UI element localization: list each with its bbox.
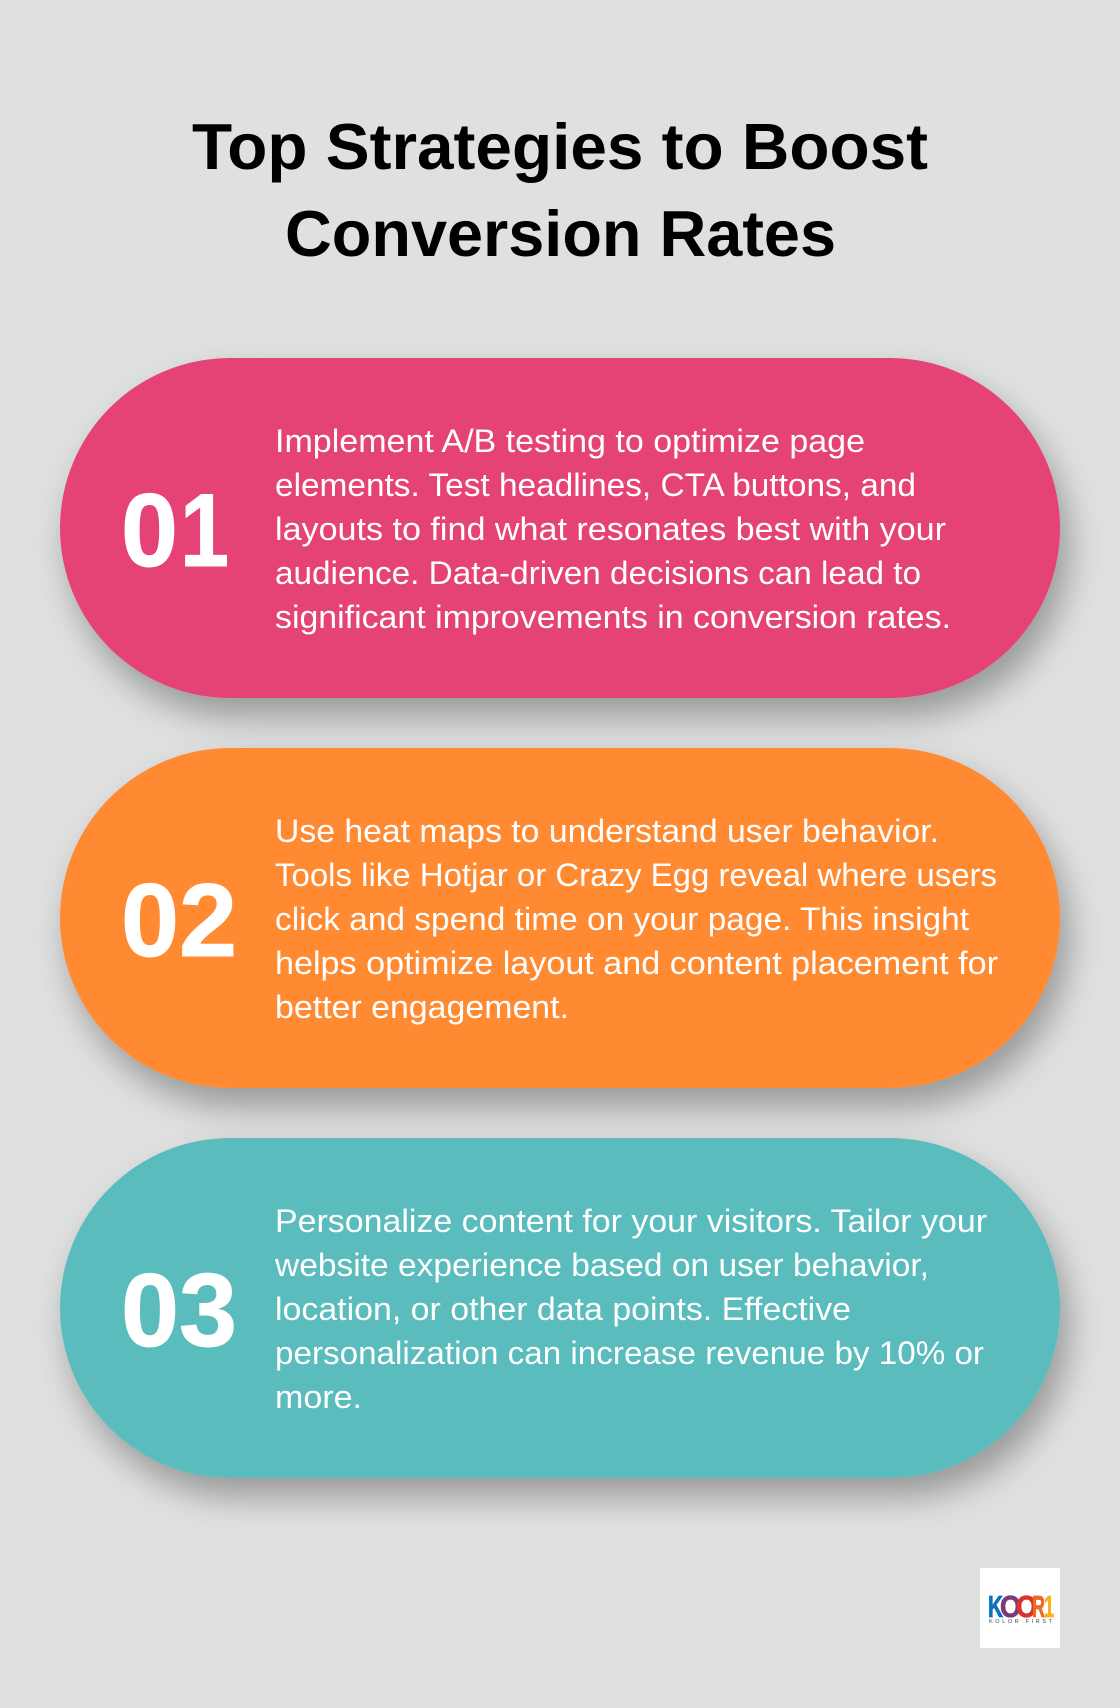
logo: KOOR1 Kolor First: O <box>1016 1589 1037 1624</box>
text block: heat maps: click and spend time on your page. This insight <box>275 901 969 937</box>
text block: personalization: Personalize content for your visitors. Tailor your <box>275 1203 987 1239</box>
text block: heat maps <box>275 813 998 1025</box>
number 01: 0 <box>121 473 178 589</box>
title <box>192 110 928 270</box>
logo: KOOR1 Kolor First: KOLOR FIRST <box>989 1619 1053 1625</box>
text block: personalization: website experience based on user behavior, <box>274 1247 929 1283</box>
text block: A/B testing: audience. Data-driven decisions can lead to <box>275 555 921 591</box>
number 02: 02 <box>121 863 237 979</box>
text block: personalization: personalization can increase revenue by 10% or <box>275 1335 984 1371</box>
panel: strategy 02 heat maps <box>60 748 1060 1088</box>
logo: KOOR1 Kolor First <box>980 1568 1060 1648</box>
title: Conversion Rates <box>285 197 836 270</box>
panel: strategy 03 personalization <box>60 1138 1060 1478</box>
logo: KOOR1 Kolor First: K <box>988 1589 1003 1624</box>
text block: A/B testing: Implement A/B testing to optimize page <box>275 423 865 459</box>
number 03: 03 <box>121 1253 237 1369</box>
text block: heat maps: Use heat maps to understand user behavior. <box>275 813 939 849</box>
title: Top Strategies to Boost <box>192 110 928 183</box>
text block: heat maps: helps optimize layout and content placement for <box>275 945 998 981</box>
pink pill background <box>60 358 1060 698</box>
text block: A/B testing: layouts to find what resonates best with your <box>275 511 946 547</box>
text block: heat maps: better engagement. <box>275 989 569 1025</box>
logo: KOOR1 Kolor First: O <box>1000 1589 1021 1624</box>
logo: KOOR1 Kolor First: R <box>1032 1589 1045 1624</box>
logo: KOOR1 Kolor First: 1 <box>1044 1589 1054 1624</box>
text block: heat maps: Tools like Hotjar or Crazy Egg reveal where users <box>275 857 997 893</box>
teal pill background <box>60 1138 1060 1478</box>
orange pill background <box>60 748 1060 1088</box>
number 01: 1 <box>180 473 229 589</box>
text block: personalization <box>274 1203 987 1415</box>
text block: A/B testing: elements. Test headlines, CTA buttons, and <box>275 467 916 503</box>
text block: A/B testing: significant improvements in conversion rates. <box>275 599 951 635</box>
text block: personalization: location, or other data points. Effective <box>275 1291 851 1327</box>
text block: A/B testing <box>275 423 951 635</box>
panel: strategy 01 A/B testing <box>60 358 1060 698</box>
text block: personalization: more. <box>275 1379 362 1415</box>
number 01 <box>121 473 229 589</box>
